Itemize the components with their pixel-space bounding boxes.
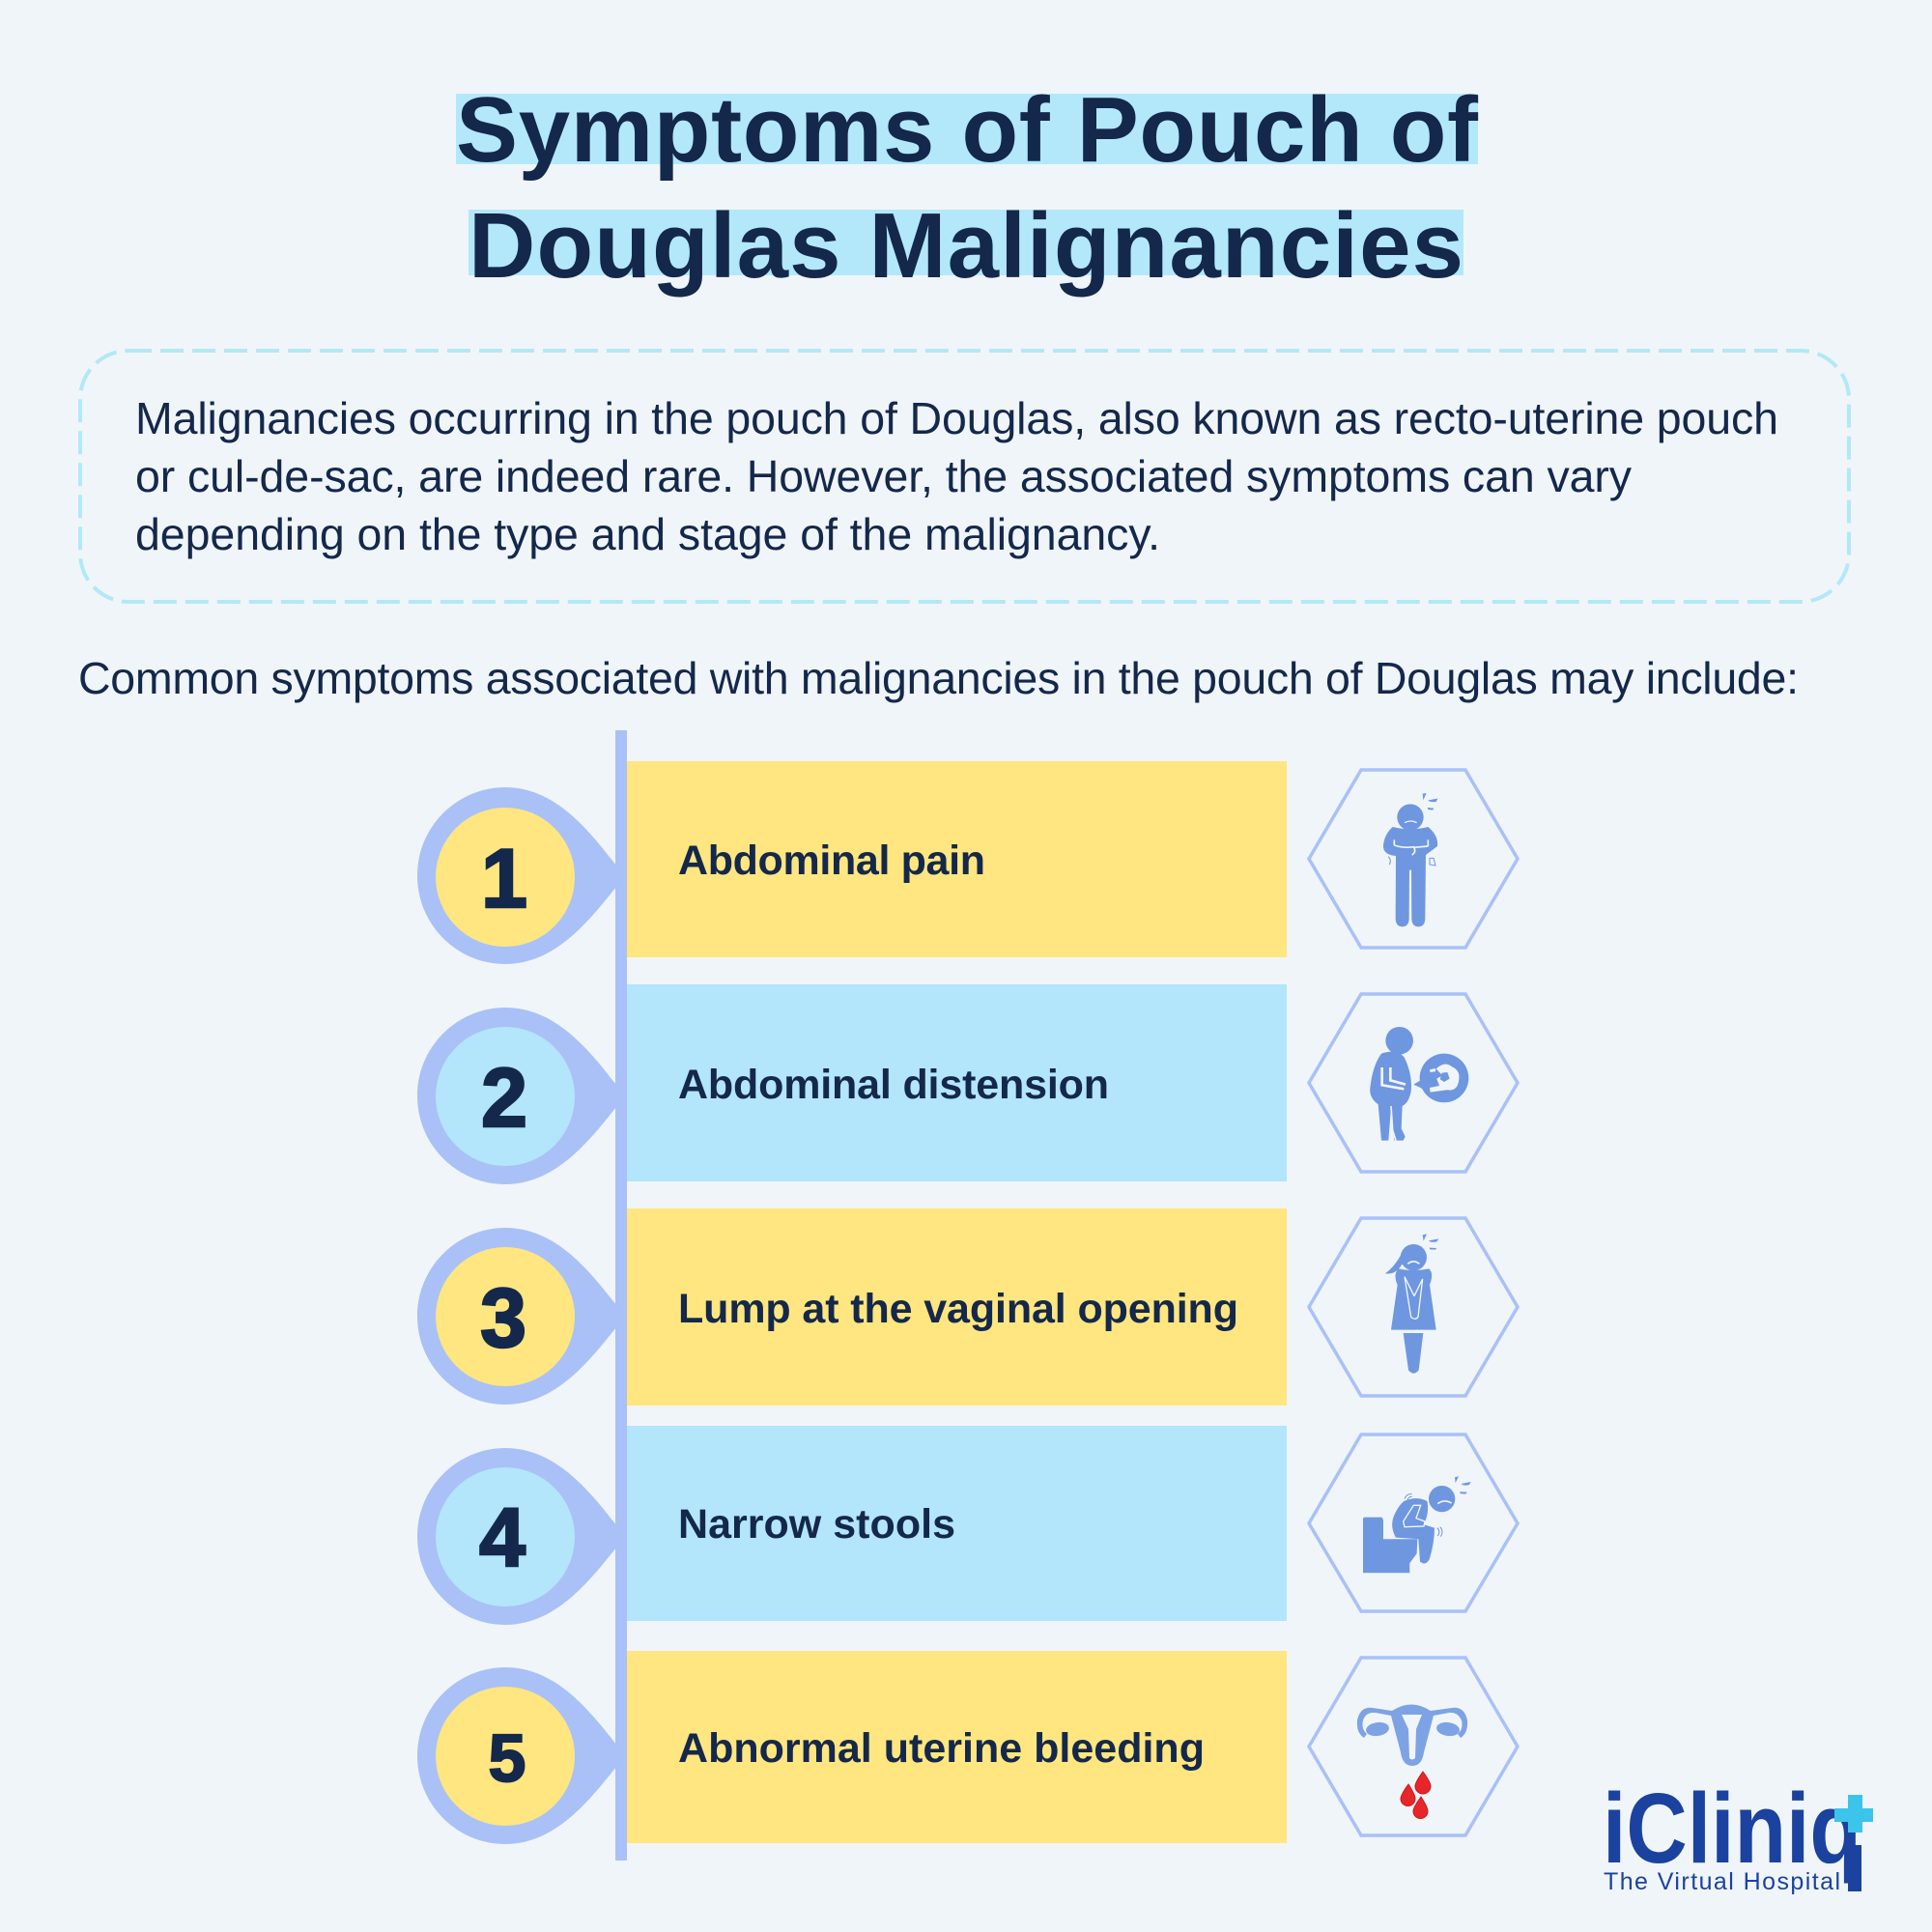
number pin 3: 3 — [480, 1272, 526, 1365]
label bar 2: Abdominal distension — [678, 1062, 1109, 1108]
label bar 1 — [627, 761, 1287, 957]
number pin 4: 4 — [479, 1492, 526, 1584]
number pin 4 — [417, 1448, 616, 1625]
title: Symptoms of Pouch of — [456, 78, 1479, 182]
icon: uterus with blood drops — [1309, 1658, 1518, 1835]
number pin 2: 2 — [481, 1052, 527, 1145]
blood drops — [1401, 1772, 1431, 1819]
label bar 3: Lump at the vaginal opening — [678, 1286, 1238, 1332]
label bar 5: Abnormal uterine bleeding — [678, 1725, 1205, 1772]
label bar 2 — [627, 984, 1287, 1181]
icon: person with bloated abdomen — [1309, 994, 1518, 1172]
uterus — [1357, 1704, 1467, 1766]
item 3: lump at the vaginal opening — [417, 1208, 1518, 1406]
number pin 5 — [417, 1667, 616, 1844]
number pin 2 — [417, 1008, 616, 1184]
subheading: Common symptoms associated with malignancies in the pouch of Douglas may include: — [78, 653, 1799, 703]
panel: intro text box: or cul-de-sac, are indeed rare. However, the associated symptoms can vary — [135, 451, 1633, 501]
logo: iCliniq: The Virtual Hospital — [1604, 1868, 1840, 1895]
label bar 4 — [627, 1426, 1287, 1621]
label bar 4: Narrow stools — [678, 1501, 955, 1548]
number pin 3 — [417, 1228, 616, 1405]
panel: intro text box: depending on the type and stage of the malignancy. — [135, 509, 1160, 559]
icon: person on toilet — [1309, 1435, 1518, 1611]
icon: person with stomach ache — [1309, 770, 1518, 948]
panel: intro text box — [80, 351, 1849, 602]
icon: woman with pelvic discomfort — [1309, 1218, 1518, 1396]
number pin 1 — [417, 787, 616, 964]
title: Douglas Malignancies — [469, 194, 1463, 298]
item 2: abdominal distension — [417, 984, 1518, 1184]
label bar 3 — [627, 1208, 1287, 1406]
number pin 5: 5 — [489, 1720, 526, 1796]
timeline vertical bar — [615, 730, 627, 1861]
item 4: narrow stools — [417, 1426, 1518, 1625]
item 1: abdominal pain — [417, 761, 1518, 964]
number pin 1: 1 — [481, 833, 527, 925]
item 5: abnormal uterine bleeding — [417, 1651, 1518, 1844]
label bar 5 — [627, 1651, 1287, 1843]
logo: iCliniq: iCliniq — [1603, 1773, 1861, 1884]
title — [456, 78, 1479, 298]
logo plus — [1834, 1795, 1873, 1833]
panel: intro text box: Malignancies occurring in the pouch of Douglas, also known as recto-uterine pouch — [135, 393, 1778, 443]
label bar 1: Abdominal pain — [678, 838, 985, 884]
